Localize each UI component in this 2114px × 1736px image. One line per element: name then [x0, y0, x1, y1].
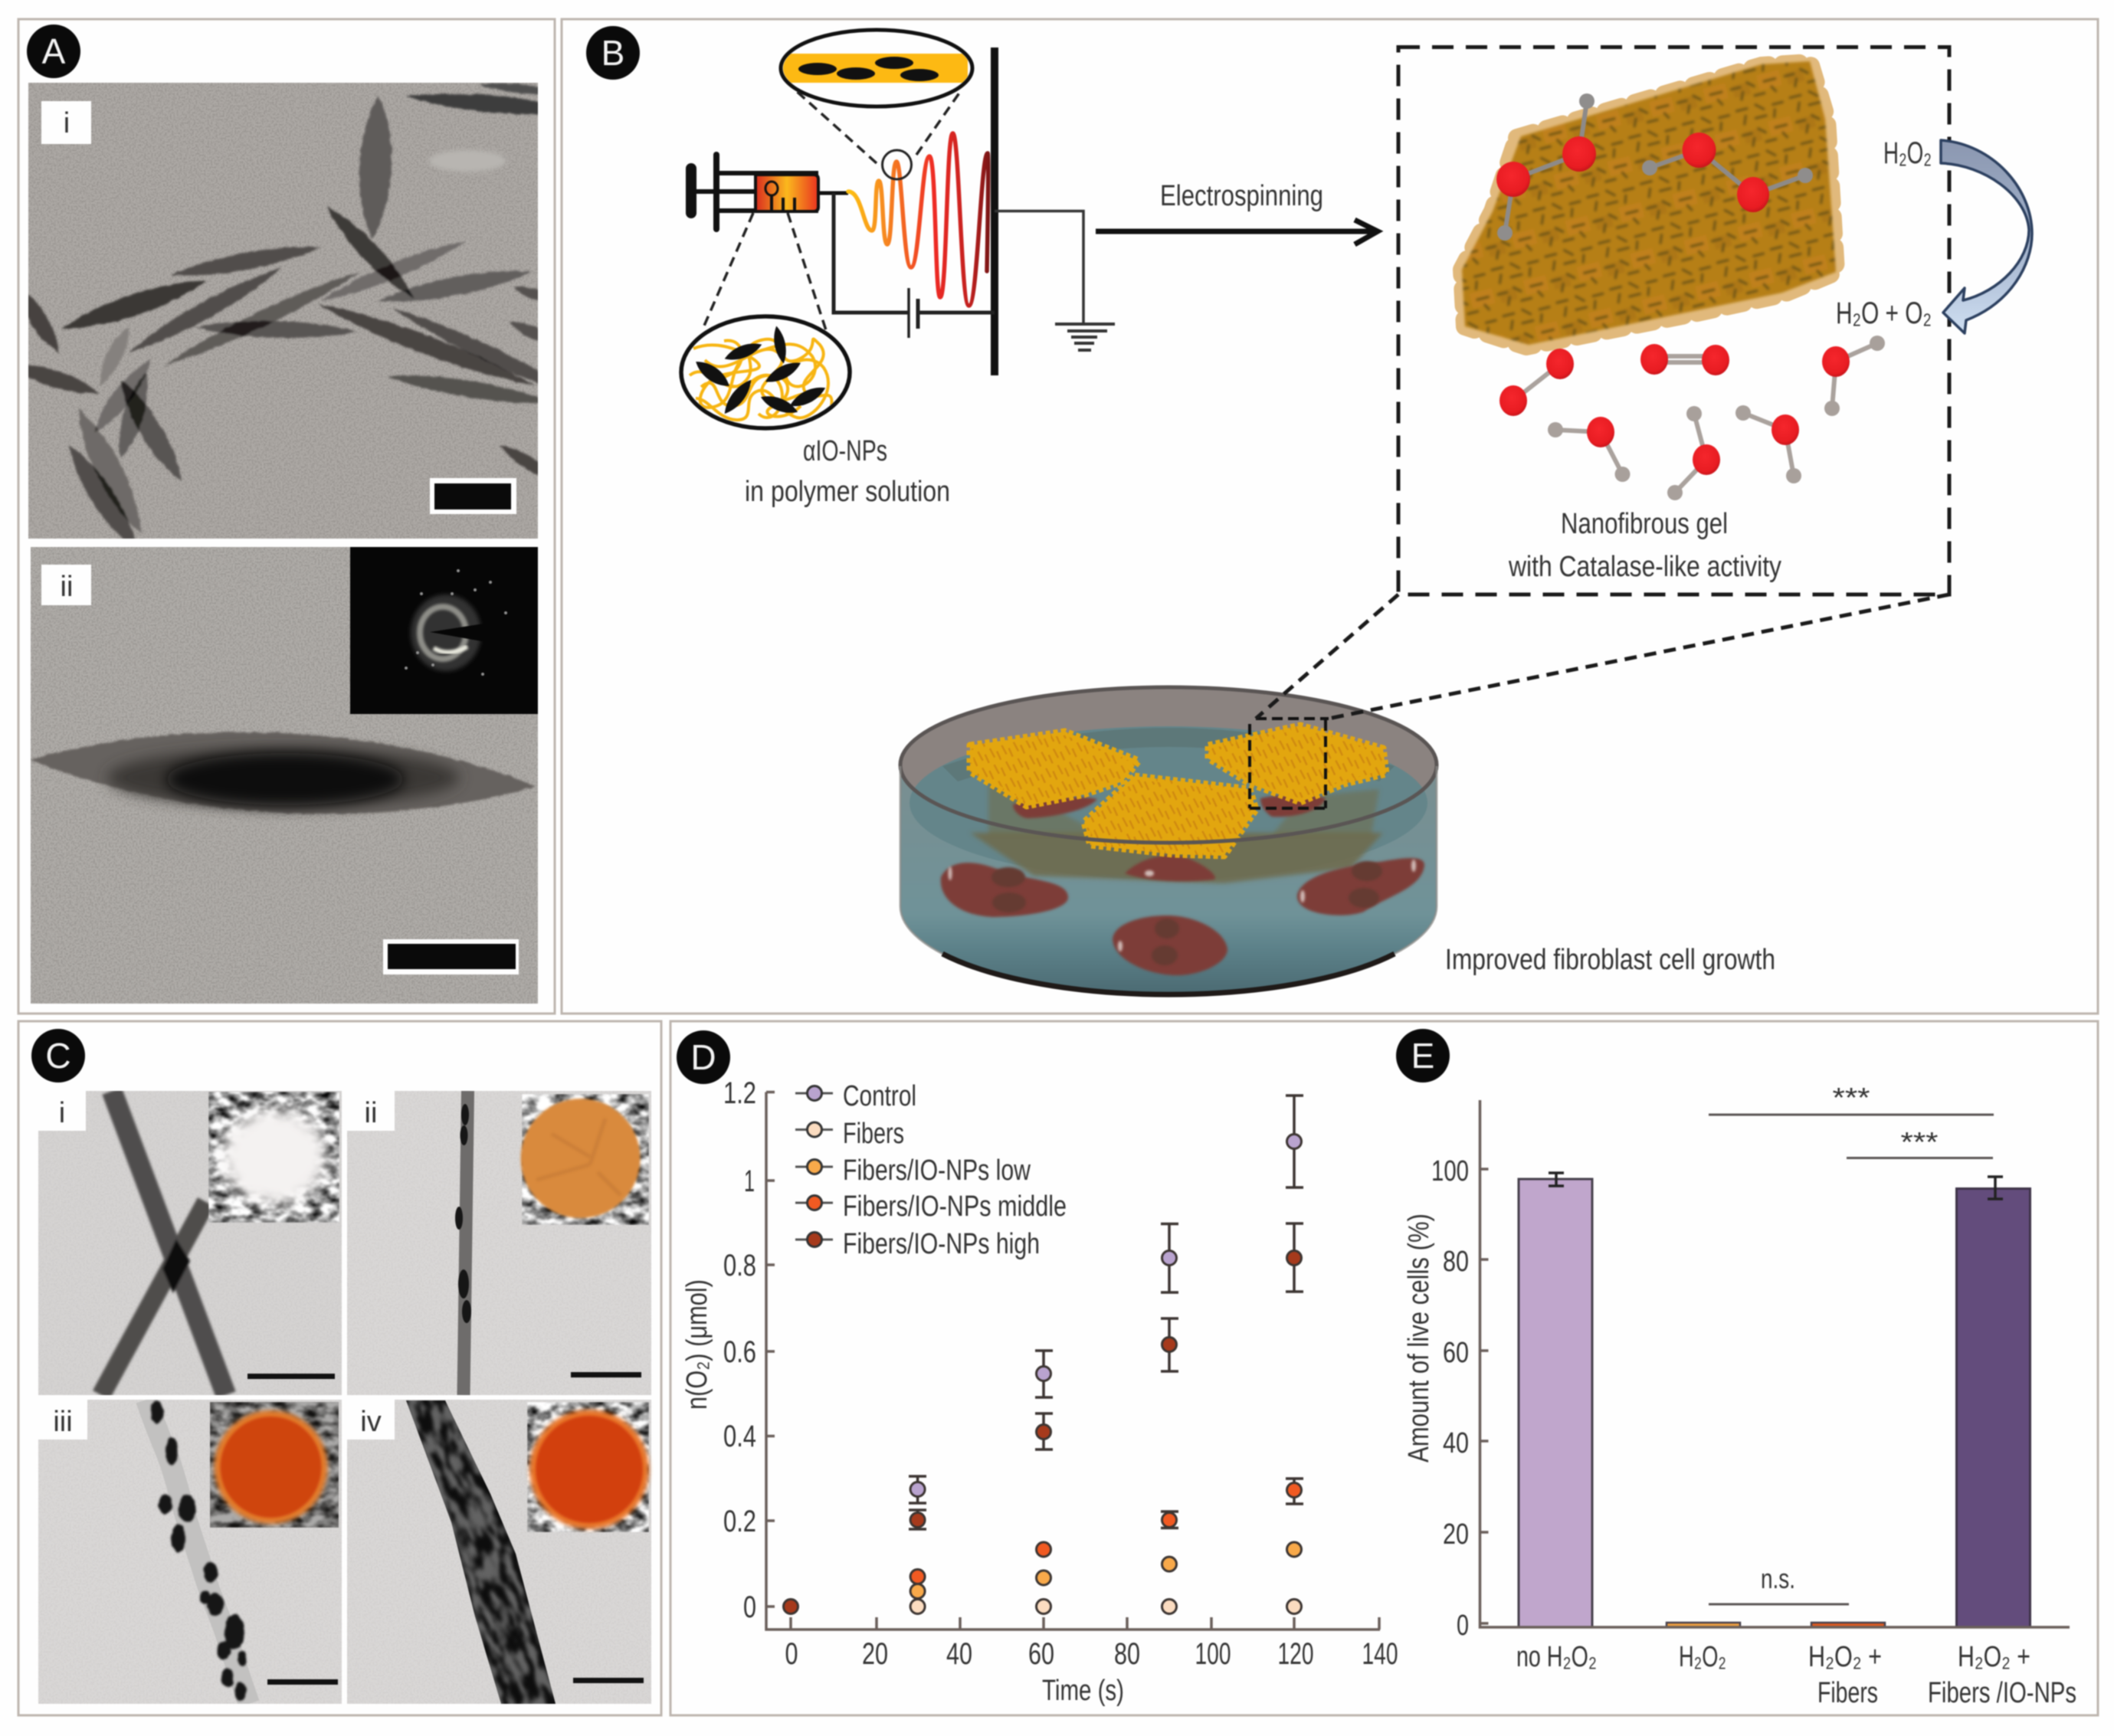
significance brackets	[1709, 1115, 1994, 1604]
label iv: iv	[360, 1406, 382, 1438]
curved reaction arrow	[1941, 140, 2032, 333]
series: Fibers/IO-NPs low	[910, 1542, 1301, 1598]
bar: no H2O2	[1519, 1179, 1592, 1627]
scale bar i	[430, 478, 516, 514]
micrograph C-iii	[38, 1400, 342, 1704]
y axis tick labels: 0.6	[723, 1335, 756, 1369]
y axis tick labels	[1431, 1155, 1469, 1642]
badge A	[27, 25, 80, 78]
category labels: no H₂O₂	[1516, 1641, 1597, 1673]
micrograph C-i	[38, 1091, 342, 1395]
ground connection	[995, 211, 1115, 350]
error bars	[1549, 1173, 2003, 1199]
hydrogen peroxide molecules on gel	[1496, 93, 1813, 241]
significance labels	[1833, 1082, 1939, 1158]
legend: Fibers/IO-NPs low	[843, 1155, 1031, 1187]
arrow to gel	[1096, 220, 1378, 244]
label ii	[41, 565, 91, 605]
label i: i	[59, 1097, 65, 1129]
badge E: E	[1411, 1036, 1434, 1076]
y axis tick labels: 0	[743, 1590, 756, 1624]
legend: Fibers/IO-NPs middle	[843, 1191, 1067, 1223]
legend: Fibers/IO-NPs high	[843, 1228, 1040, 1260]
label iv	[347, 1400, 395, 1440]
badge C: C	[45, 1036, 71, 1076]
scale bar	[247, 1374, 335, 1379]
nanofibrous gel sheet	[1462, 61, 1836, 346]
caption: Electrospinning: Electrospinning	[1160, 180, 1323, 212]
series: Fibers/IO-NPs middle	[910, 1483, 1301, 1584]
badge B: B	[601, 33, 624, 73]
label i: i	[64, 107, 70, 139]
x axis tick labels: 20	[862, 1637, 888, 1671]
y axis tick labels: 0.2	[723, 1505, 756, 1538]
x axis tick labels: 120	[1278, 1637, 1313, 1671]
y axis tick labels: 1	[744, 1164, 755, 1198]
legend: Control	[843, 1080, 916, 1112]
panel D and E frame	[670, 1021, 2098, 1715]
caption: nanoparticles: in polymer solution	[745, 476, 950, 508]
x axis tick labels	[785, 1637, 1398, 1671]
series: Fibers/IO-NPs high	[783, 1250, 1301, 1613]
significance labels: ***	[1833, 1082, 1870, 1113]
category labels: Fibers	[1817, 1677, 1878, 1709]
collector plate	[991, 47, 998, 375]
scale bar	[571, 1372, 641, 1377]
y axis tick labels: 1.2	[723, 1076, 756, 1110]
category labels: H₂O₂ +	[1808, 1641, 1882, 1673]
micrograph C-iv	[252, 1302, 743, 1736]
panel B: electrospinning schematic	[562, 19, 2098, 1014]
caption: fibroblast growth: Improved fibroblast cell growth	[1445, 944, 1775, 976]
petri dish with gels and cells	[900, 687, 1437, 994]
scale bar	[267, 1679, 338, 1685]
panel E: live cell bar chart	[1396, 1029, 2076, 1709]
panel A: TEM images of nanoparticles	[5, 19, 585, 1014]
y axis tick labels: 100	[1431, 1155, 1469, 1187]
syringe	[686, 152, 848, 232]
badge D	[677, 1030, 730, 1084]
diffraction pattern inset	[350, 547, 538, 714]
y axis tick labels: 80	[1443, 1246, 1469, 1278]
electrospinning jet	[848, 133, 988, 306]
legend	[795, 1080, 1067, 1260]
axes and ticks	[766, 1092, 1380, 1630]
y axis tick labels: 20	[1443, 1518, 1469, 1551]
bar: H2O2 + Fibers	[1811, 1623, 1885, 1627]
dashed detail box	[1398, 47, 1949, 594]
category labels	[1516, 1641, 2076, 1709]
label ii: ii	[61, 571, 73, 603]
error bars	[909, 1096, 1303, 1529]
series: Control	[910, 1134, 1301, 1497]
badge E	[1396, 1029, 1450, 1083]
micrograph C-ii	[347, 1091, 651, 1395]
panel C: fiber micrographs	[17, 1019, 664, 1718]
y axis tick labels	[723, 1076, 756, 1624]
label iii: iii	[53, 1406, 73, 1438]
y axis title: Amount of live cells (%)	[1403, 1214, 1435, 1462]
badge C	[31, 1029, 85, 1083]
x axis tick labels: 80	[1114, 1637, 1140, 1671]
y axis tick labels: 0.8	[723, 1249, 756, 1282]
legend: Fibers	[843, 1118, 904, 1150]
caption: nanofibrous gel: with Catalase-like activity	[1508, 551, 1781, 583]
micrograph i: spindle particles	[28, 82, 539, 539]
micrograph ii: single particle	[29, 547, 538, 1004]
zoom dashes from jet to ellipse	[702, 88, 962, 332]
scale bar	[573, 1678, 644, 1683]
label i	[38, 1091, 86, 1131]
n.s. label: n.s.	[1761, 1563, 1795, 1594]
gel pieces in dish	[970, 726, 1386, 856]
label iii	[38, 1400, 87, 1440]
inset white gel	[208, 1092, 339, 1223]
caption: nanofibrous gel	[1508, 508, 1781, 583]
badge A: A	[42, 31, 66, 71]
magnified fiber ellipse	[781, 30, 972, 106]
fibroblast cells	[941, 795, 1424, 975]
products label: H₂O + O₂	[1836, 296, 1932, 330]
category labels: H₂O₂	[1679, 1641, 1726, 1673]
label ii	[347, 1091, 395, 1131]
x axis tick labels: 0	[785, 1637, 798, 1671]
oxygen and water molecules released	[1499, 336, 1885, 500]
H2O2 reactant label: H₂O₂	[1883, 136, 1932, 170]
magnified polymer solution circle	[681, 316, 850, 428]
scale bar ii	[383, 939, 519, 974]
series: Fibers	[910, 1600, 1301, 1613]
category labels: H₂O₂ +	[1958, 1641, 2030, 1673]
x axis tick labels: 60	[1028, 1637, 1054, 1671]
power circuit with battery	[834, 193, 995, 338]
inset red gel	[527, 1402, 649, 1532]
y axis tick labels: 0	[1457, 1610, 1469, 1642]
panel D: oxygen generation scatter chart	[677, 1030, 1398, 1707]
significance labels: ***	[1900, 1126, 1939, 1158]
x axis tick labels: 40	[946, 1637, 972, 1671]
badge D: D	[690, 1037, 716, 1077]
x axis title: Time (s)	[1042, 1675, 1124, 1707]
y axis tick labels: 60	[1443, 1337, 1469, 1369]
y axis tick labels: 40	[1443, 1427, 1469, 1459]
label ii: ii	[365, 1097, 377, 1129]
inset orange-red gel	[210, 1402, 339, 1528]
caption: nanoparticles	[745, 435, 950, 508]
detail box on dish	[1250, 719, 1329, 808]
label i	[41, 101, 91, 144]
y axis tick labels: 0.4	[723, 1420, 756, 1453]
badge B	[586, 26, 640, 80]
axes and ticks	[1480, 1100, 2070, 1627]
caption: nanoparticles: αIO-NPs	[803, 435, 887, 467]
small circle on jet	[883, 150, 912, 179]
bar: H2O2	[1667, 1623, 1740, 1627]
y axis title: n(O₂) (μmol)	[681, 1279, 713, 1410]
dashed connector lines	[1256, 594, 1949, 719]
bar: H2O2 + Fibers/IO-NPs	[1957, 1189, 2030, 1627]
inset light orange gel	[521, 1094, 649, 1225]
caption: nanofibrous gel: Nanofibrous gel	[1561, 508, 1728, 540]
x axis tick labels: 100	[1195, 1637, 1231, 1671]
x axis tick labels: 140	[1362, 1637, 1398, 1671]
